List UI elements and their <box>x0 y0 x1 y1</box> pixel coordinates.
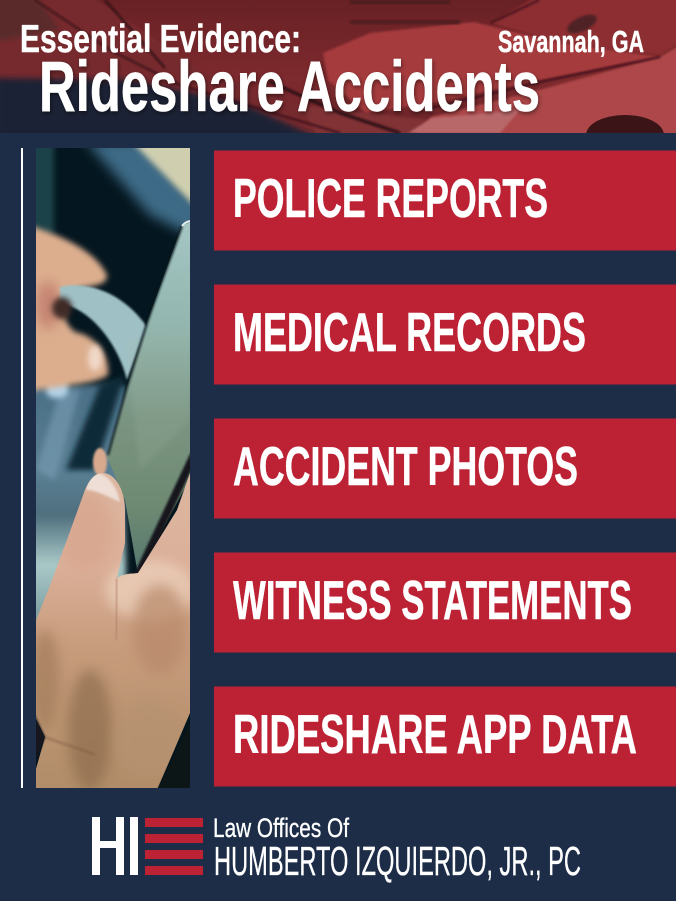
photo detail: lower-left blurred interior <box>26 385 126 635</box>
heading: Essential Evidence: Essential Evidence: <box>20 18 301 61</box>
vertical white rule <box>21 148 23 788</box>
photo detail: blue seat band <box>84 148 190 236</box>
panel: medical records <box>214 284 676 384</box>
header banner with crashed cars photo <box>0 0 676 133</box>
photo detail: phone <box>107 222 190 570</box>
photo: hand holding phone in car <box>36 148 190 788</box>
photo detail: blurred fingers <box>28 225 108 392</box>
panel: witness statements <box>214 552 676 652</box>
firm name: Law Offices Of: Law Offices Of <box>213 813 349 843</box>
photo detail: hand <box>36 473 190 788</box>
panel: rideshare app data <box>214 686 676 786</box>
panel: accident photos <box>214 418 676 518</box>
panel: police reports <box>214 150 676 250</box>
logo: HI monogram with red stripes <box>92 817 203 875</box>
